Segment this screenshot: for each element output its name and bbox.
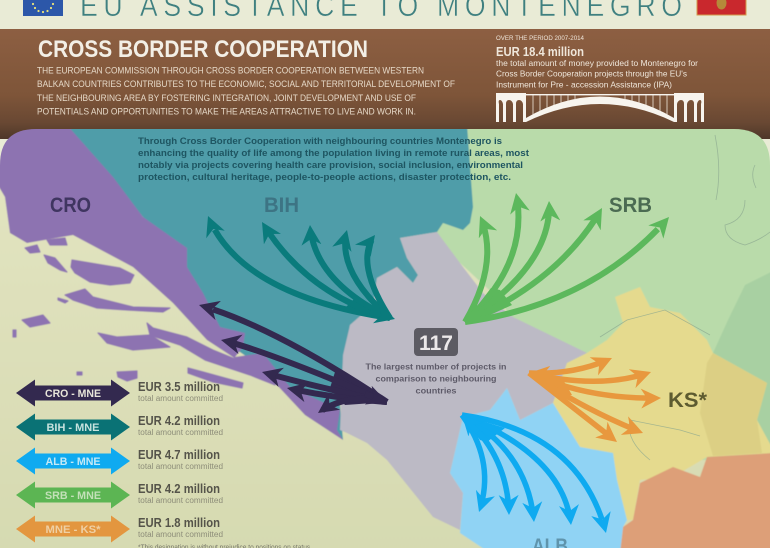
callout: 117 projects: 117 (419, 332, 453, 355)
text block: map introduction: protection, cultural heritage, people-to-people actions, disaster protection, etc. (138, 172, 511, 183)
legend row: MNE - KS*: total amount committed (138, 530, 223, 539)
text block: map introduction: enhancing the quality of life among the population living in remote rural areas, most (138, 148, 530, 159)
legend row: MNE - KS*: MNE - KS* (46, 524, 101, 536)
legend row: BIH - MNE (16, 413, 223, 440)
label: KS*: KS* (668, 389, 708, 412)
label: CRO: CRO (50, 194, 91, 217)
legend row: SRB - MNE: EUR 4.2 million (138, 481, 220, 496)
text block: total funding: the total amount of money provided to Montenegro for (496, 58, 698, 68)
map: countries (0, 125, 770, 548)
callout: 117 projects: The largest number of projects in (366, 362, 506, 372)
legend row: ALB - MNE: total amount committed (138, 462, 223, 471)
header: Montenegro flag (697, 0, 746, 15)
legend row: MNE - KS*: EUR 1.8 million (138, 515, 220, 530)
icon: bridge (496, 93, 704, 122)
legend row: SRB - MNE (16, 481, 223, 508)
panel: map (0, 125, 770, 548)
legend row: SRB - MNE: SRB - MNE (45, 490, 101, 502)
legend row: ALB - MNE: EUR 4.7 million (138, 447, 220, 462)
callout: 117 projects: comparison to neighbouring (376, 374, 496, 384)
arrows: Bosnia and Herzegovina (208, 216, 395, 319)
text block: total funding: OVER THE PERIOD 2007-2014 (496, 35, 584, 42)
arrows: Kosovo (529, 358, 661, 442)
callout: 117 projects (366, 328, 506, 396)
text block: total funding: Cross Border Cooperation projects through the EU's (496, 68, 687, 78)
text block: programme description: THE EUROPEAN COMMISSION THROUGH CROSS BORDER COOPERATION BETWEEN WESTERN (37, 66, 424, 76)
label: BIH: BIH (264, 194, 299, 217)
heading: cross border cooperation: CROSS BORDER COOPERATION (38, 36, 368, 63)
text block: map introduction: notably via projects covering health care provision, social inclusion, environmental (138, 160, 523, 171)
text block: programme description: BALKAN COUNTRIES CONTRIBUTES TO THE ECONOMIC, SOCIAL AND TERRITORIAL DEVELOPMENT OF (37, 79, 455, 90)
map: rivers (600, 135, 770, 460)
legend row: CRO - MNE: total amount committed (138, 394, 223, 403)
panel: cross border cooperation intro (0, 29, 770, 139)
legend row: BIH - MNE: EUR 4.2 million (138, 413, 220, 428)
legend row: BIH - MNE: total amount committed (138, 428, 223, 437)
text block: programme description: THE NEIGHBOURING AREA BY FOSTERING INTEGRATION, JOINT DEVELOPMENT AND USE OF (37, 93, 416, 104)
arrows: Croatia (199, 305, 387, 413)
arrows: Serbia (465, 193, 669, 322)
legend row: ALB - MNE (16, 447, 223, 474)
legend row: ALB - MNE: ALB - MNE (46, 456, 100, 468)
legend row: SRB - MNE: total amount committed (138, 496, 223, 505)
arrows: Albania (462, 415, 606, 533)
legend row: CRO - MNE: EUR 3.5 million (138, 379, 220, 394)
legend row: BIH - MNE: BIH - MNE (46, 422, 100, 434)
callout: 117 projects: countries (416, 386, 457, 396)
text block: total funding: EUR 18.4 million (496, 45, 584, 59)
text block: map introduction (138, 136, 530, 183)
text block: total funding (496, 35, 698, 90)
legend row: CRO - MNE: CRO - MNE (45, 388, 101, 400)
label: SRB: SRB (609, 194, 652, 217)
text block: total funding: Instrument for Pre - accession Assistance (IPA) (496, 80, 672, 90)
header: EU flag (23, 0, 63, 16)
text block: programme description (37, 66, 455, 118)
legend row: CRO - MNE (16, 379, 223, 406)
legend row: MNE - KS* (16, 515, 223, 542)
text block: programme description: POTENTIALS AND OPPORTUNITIES TO MAKE THE AREAS ATTRACTIVE TO LIVE AND WORK IN. (37, 106, 416, 118)
text block: map introduction: Through Cross Border Cooperation with neighbouring countries Montenegro is (138, 136, 502, 147)
